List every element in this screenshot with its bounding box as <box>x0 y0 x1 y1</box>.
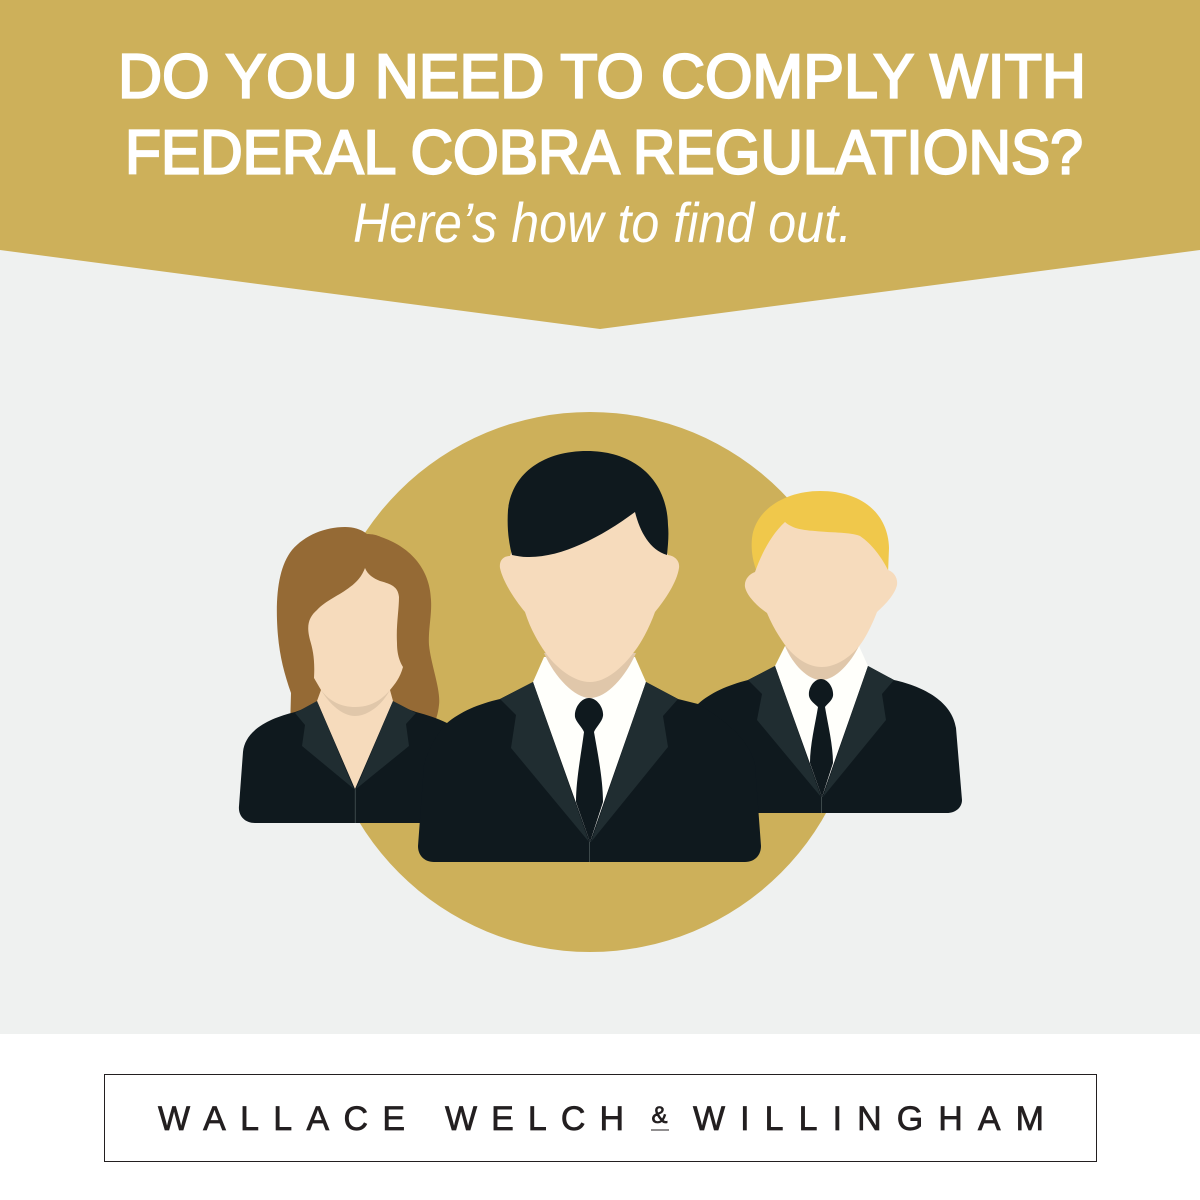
subtitle: Here’s how to find out. <box>353 191 852 254</box>
icon: blond man <box>690 491 962 813</box>
icon: central man <box>418 451 761 862</box>
central man shirt <box>533 657 646 842</box>
ampersand underline <box>651 1130 669 1131</box>
central man body <box>418 682 761 862</box>
blond man hair <box>752 491 889 574</box>
title: DO YOU NEED TO COMPLY WITH <box>118 42 1086 111</box>
icon: woman <box>239 527 450 823</box>
central man hair <box>508 451 668 557</box>
woman jacket seam <box>354 789 356 823</box>
central man tie <box>575 698 603 842</box>
blond man tie <box>809 679 833 797</box>
gold circle <box>320 412 860 952</box>
blond man face <box>745 522 897 667</box>
title <box>118 42 1086 187</box>
blond man body <box>690 666 962 813</box>
central man jacket seam <box>588 842 590 862</box>
logo text: WILLINGHAM <box>693 1100 1044 1138</box>
woman neck shadow <box>321 690 390 716</box>
logo text: WELCH <box>445 1100 624 1138</box>
blond man shirt <box>775 646 868 797</box>
woman body <box>239 690 450 823</box>
logo text: WALLACE <box>158 1100 405 1138</box>
central man lapels <box>500 682 678 842</box>
title: FEDERAL COBRA REGULATIONS? <box>125 118 1083 187</box>
header banner <box>0 0 1200 329</box>
blond man neck shadow <box>785 646 859 680</box>
logo text <box>158 1100 1044 1138</box>
logo text: & <box>652 1102 668 1129</box>
woman face and chest <box>308 568 403 789</box>
central man neck shadow <box>544 653 636 698</box>
blond man lapels <box>748 666 894 797</box>
woman hair <box>277 527 439 730</box>
blond man jacket seam <box>820 797 822 813</box>
central man face <box>500 500 679 682</box>
logo box <box>104 1074 1096 1162</box>
woman lapels <box>295 701 416 789</box>
